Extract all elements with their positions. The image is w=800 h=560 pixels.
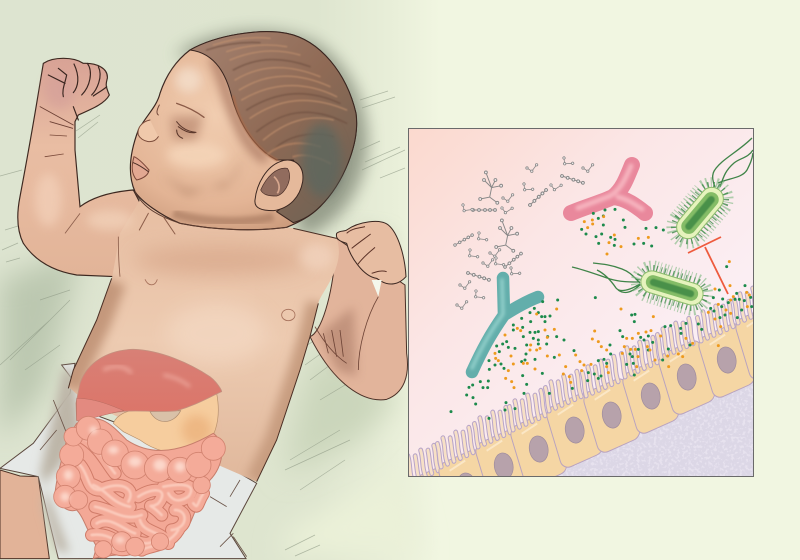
metabolites: dots [449, 208, 753, 420]
stomach [113, 393, 218, 453]
jaw line [135, 192, 287, 230]
arm highlights [35, 72, 133, 277]
cilia [672, 182, 728, 244]
hair strands [207, 38, 347, 163]
ear [255, 160, 303, 211]
flagella [572, 263, 640, 292]
orange metabolite dots [493, 215, 751, 389]
colon segments [54, 416, 225, 558]
stomach hole [150, 411, 181, 422]
hair shadow [302, 123, 342, 197]
antibody: pink [571, 165, 645, 213]
lips [132, 157, 149, 180]
panel background [408, 128, 754, 477]
stomach shade [182, 415, 212, 445]
torso outline [68, 228, 337, 482]
fist fingers [40, 63, 107, 157]
thigh [0, 470, 49, 559]
face features [132, 103, 287, 234]
bacterium: middle [572, 263, 706, 308]
baby illustration [0, 32, 407, 559]
torso [68, 200, 339, 482]
submucosa tissue [530, 370, 754, 477]
liver [76, 349, 222, 421]
diaper [0, 363, 257, 559]
head [130, 32, 357, 230]
nipples [145, 279, 295, 321]
arm crease [315, 297, 378, 370]
cell body [638, 268, 706, 308]
panel border [408, 128, 754, 476]
panel: gut microbiome inset [408, 128, 754, 477]
right hand [336, 221, 406, 284]
eyebrow [177, 103, 204, 117]
hair [190, 32, 357, 223]
bedding patch [372, 280, 382, 297]
torso shading [68, 243, 333, 482]
antibody: teal [472, 278, 538, 372]
blanket [0, 0, 440, 560]
arm shading [320, 307, 357, 377]
highlights [60, 426, 185, 543]
cell body [672, 183, 728, 243]
intestines [54, 416, 225, 558]
blanket shadows [0, 31, 420, 555]
small bowel loops [80, 437, 203, 550]
inhibition symbol [688, 237, 728, 294]
bacterium: upper right [672, 138, 753, 244]
nose [138, 120, 158, 142]
glycans [453, 154, 594, 309]
epithelial cells [395, 281, 794, 544]
raised arm [18, 58, 167, 277]
right arm [310, 238, 407, 400]
closed eye [177, 122, 196, 138]
cilia [638, 268, 706, 308]
blanket wrinkles [0, 91, 405, 556]
flagella [713, 138, 753, 187]
green metabolite dots [449, 208, 753, 420]
face shading [160, 57, 273, 221]
